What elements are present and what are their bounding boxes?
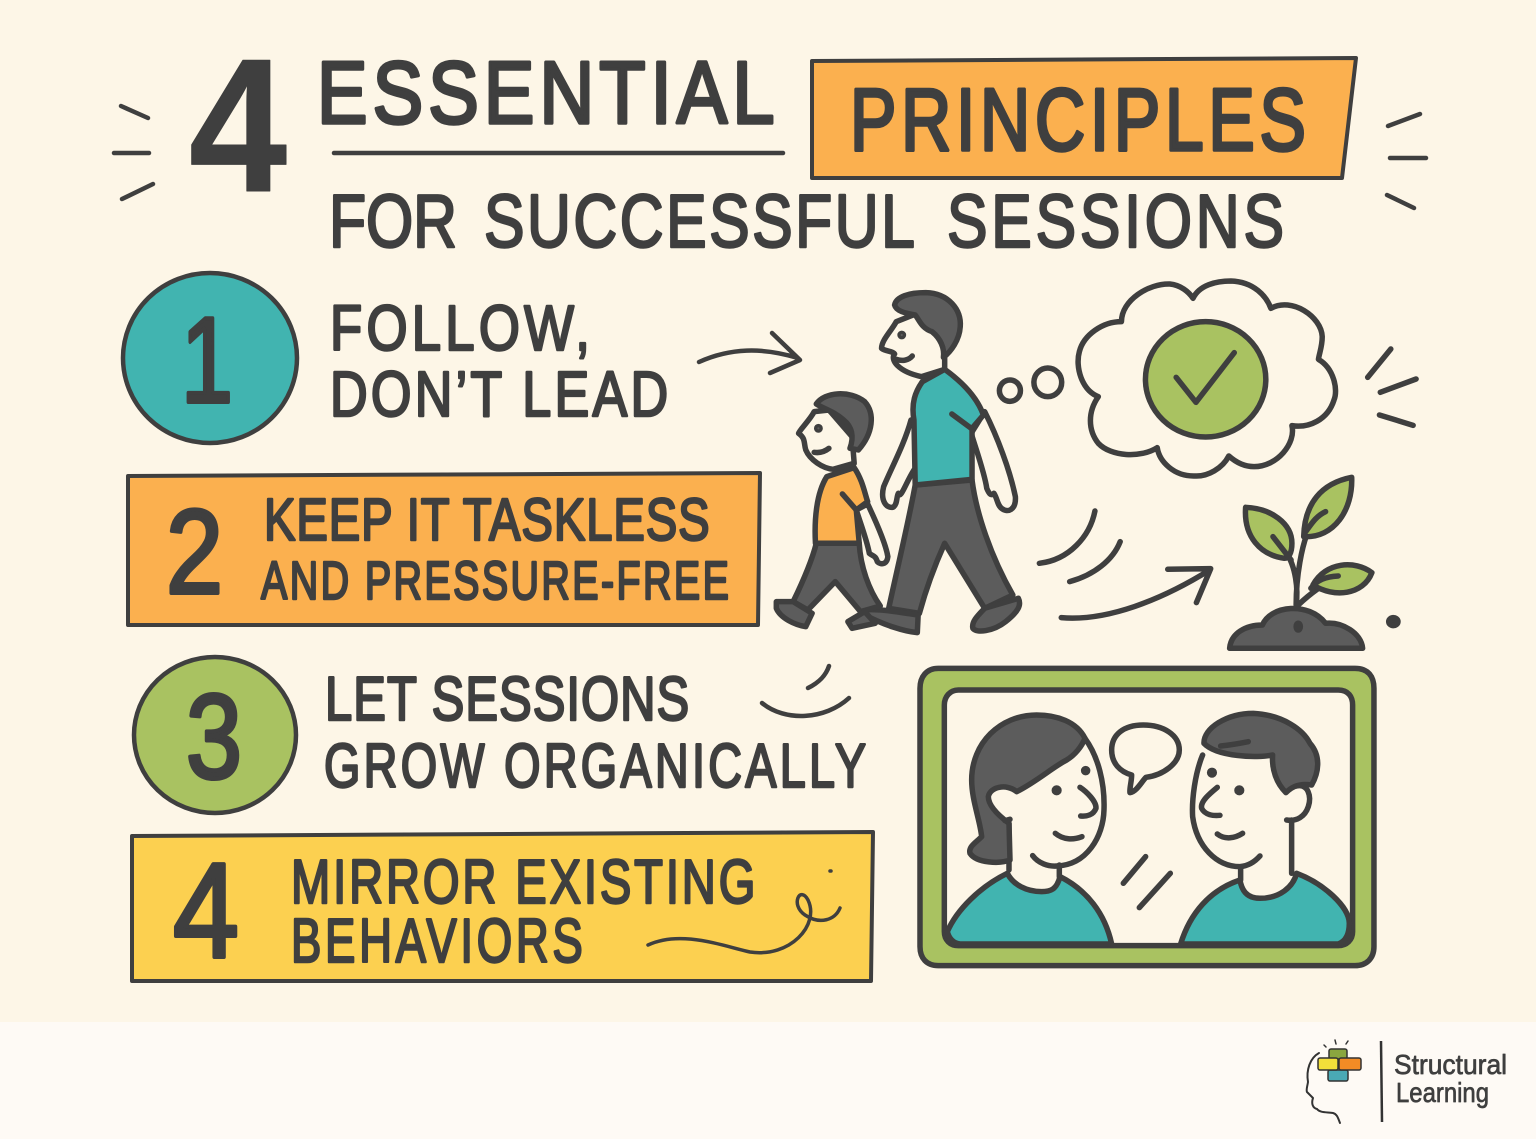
subtitle: SUCCESSFUL xyxy=(484,180,915,263)
principle 3 text: GROW ORGANICALLY xyxy=(324,731,866,801)
squiggle accents xyxy=(762,666,849,716)
subtitle xyxy=(329,180,1284,263)
logo text: Structural xyxy=(1394,1049,1507,1080)
motion curves xyxy=(1039,511,1120,582)
badge 1: 1 xyxy=(181,292,233,428)
adult walking xyxy=(865,293,1020,633)
principle 3 xyxy=(134,657,866,813)
illustration: adult and child walking, thought cloud, sprout xyxy=(776,281,1416,648)
badge 1 xyxy=(123,273,297,443)
speech bubble xyxy=(1112,725,1179,793)
principle 2 text xyxy=(261,488,729,612)
principle 1 text xyxy=(330,293,668,430)
title highlight: principles xyxy=(812,58,1356,178)
principle 2 text: KEEP IT TASKLESS xyxy=(264,488,710,553)
badge 3 xyxy=(134,657,296,813)
video call frame xyxy=(920,668,1374,966)
title xyxy=(114,20,1426,263)
principle 2 text: AND PRESSURE-FREE xyxy=(261,551,729,612)
principle 1 text: FOLLOW, xyxy=(330,293,590,364)
sprout xyxy=(1230,477,1372,648)
principle 4 text: MIRROR EXISTING xyxy=(291,847,755,917)
title highlight: principles: PRINCIPLES xyxy=(850,70,1306,169)
principle 2 xyxy=(128,473,760,625)
subtitle: SESSIONS xyxy=(947,180,1284,263)
glass glare lines xyxy=(1123,857,1170,908)
left burst lines xyxy=(114,106,153,199)
title underline xyxy=(334,151,783,155)
principle 3 text: LET SESSIONS xyxy=(325,663,689,733)
arrow to walkers xyxy=(699,333,800,373)
principle 1 xyxy=(123,273,800,443)
logo divider xyxy=(1381,1041,1382,1122)
principle 1 text: DON’T LEAD xyxy=(330,359,668,430)
dot xyxy=(1389,618,1398,626)
right burst lines xyxy=(1387,114,1426,208)
left person xyxy=(947,715,1112,944)
principle 4 xyxy=(132,832,873,986)
number 4: 4 xyxy=(173,835,239,986)
logo text: Learning xyxy=(1396,1077,1489,1108)
thought bubbles xyxy=(999,368,1062,401)
subtitle: FOR xyxy=(329,180,457,263)
title word: essential: ESSENTIAL xyxy=(317,45,775,142)
logo xyxy=(1307,1040,1507,1123)
title number 4: 4 xyxy=(189,20,287,232)
logo icon: head with blocks xyxy=(1307,1040,1361,1123)
principle 4 text xyxy=(291,847,755,976)
logo text xyxy=(1394,1049,1507,1108)
box 4 xyxy=(132,832,873,981)
principle 4 text: BEHAVIORS xyxy=(291,906,583,976)
outer green frame xyxy=(920,668,1374,966)
principle 3 text xyxy=(324,663,866,801)
growth arrow xyxy=(1061,569,1211,618)
badge 3: 3 xyxy=(186,670,242,804)
screen xyxy=(944,690,1353,946)
number 2: 2 xyxy=(166,485,223,619)
child walking xyxy=(776,394,888,628)
motion ticks near cloud xyxy=(1368,349,1416,425)
box 2 xyxy=(128,473,760,625)
right person xyxy=(1181,713,1349,944)
curly squiggle xyxy=(648,871,840,953)
thought cloud with check mark xyxy=(1078,281,1336,476)
